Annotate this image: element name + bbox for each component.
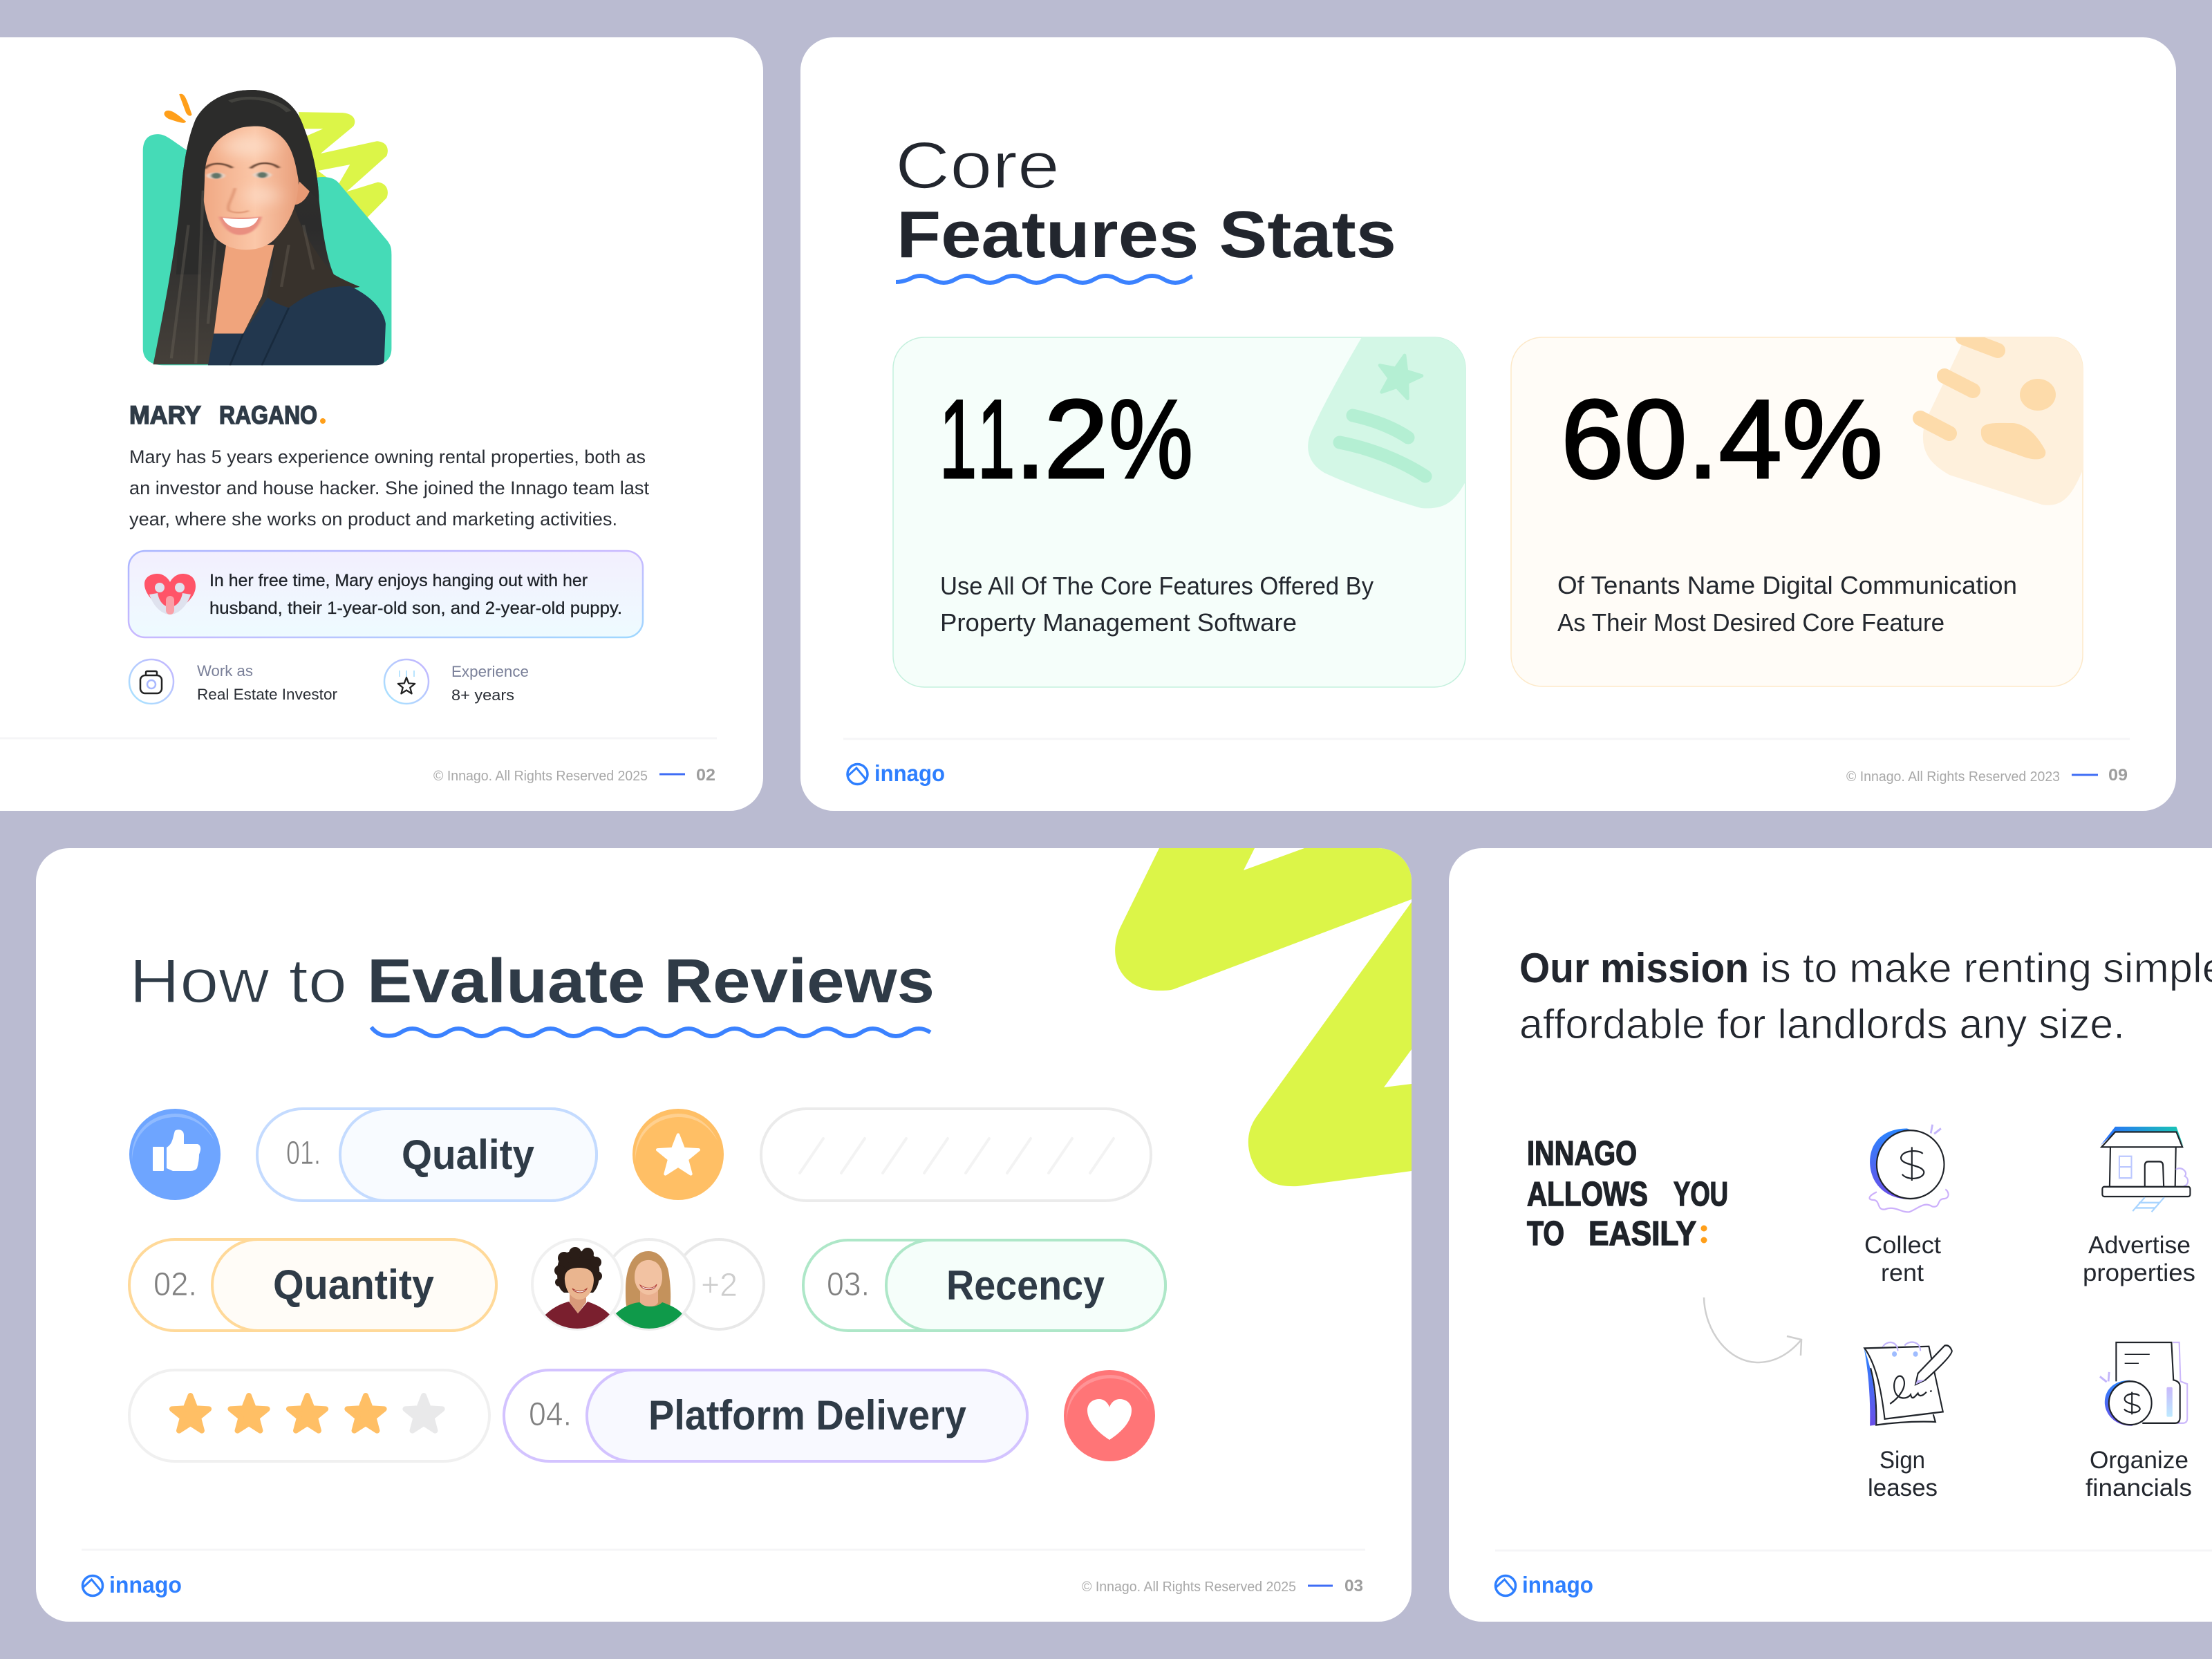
pill: 02 Quantity: 02.: [153, 1266, 197, 1303]
avatar: plus two: [674, 1239, 764, 1329]
avatars: [532, 1239, 764, 1331]
pill: star rating: [129, 1370, 489, 1461]
footer: page 03: [1082, 1577, 1363, 1595]
stat card: 11.2%: [893, 337, 1472, 687]
panel: How to Evaluate Reviews: [36, 848, 1412, 1622]
wavy underline: [371, 1027, 930, 1036]
pill: 03 Recency: [803, 1240, 1165, 1331]
title: How to: [129, 947, 347, 1016]
name heading: [129, 401, 326, 429]
work as: Real Estate Investor: [197, 686, 337, 703]
stat card: 11.2%: Use All Of The Core Features Offered By: [940, 572, 1374, 600]
rating stars: [172, 1396, 442, 1431]
label: advertise properties: [2083, 1232, 2195, 1286]
experience: 8+ years: [451, 686, 514, 704]
title: Core: [895, 129, 1060, 203]
pill: 04 Platform Delivery: 04.: [529, 1396, 572, 1433]
label: advertise properties: properties: [2083, 1259, 2195, 1286]
experience: Experience: [451, 663, 529, 680]
pill: empty striped: [761, 1109, 1151, 1201]
handwritten heading: ALLOWS: [1527, 1176, 1648, 1213]
name heading: MARY: [129, 401, 201, 429]
mission statement: Our mission: [1519, 945, 1749, 991]
footer: page 03: 03: [1344, 1577, 1363, 1595]
pill: 02 Quantity: [129, 1239, 496, 1331]
label: organize financials: [2086, 1447, 2192, 1501]
mission statement: is to make renting: [1761, 945, 2092, 991]
logo: innago: innago: [1522, 1572, 1593, 1597]
icon: advertise house: [2101, 1127, 2190, 1212]
panel: Core Features Stats: [800, 37, 2176, 811]
avatar: woman: [604, 1239, 694, 1331]
label: collect rent: [1864, 1232, 1941, 1286]
pill: 03 Recency: 03.: [827, 1266, 870, 1303]
icon: bag: [140, 671, 162, 693]
label: organize financials: financials: [2086, 1474, 2192, 1501]
stat card: 60.4%: [1511, 337, 2088, 686]
stat card: 60.4%: Of Tenants Name Digital Communication: [1557, 571, 2017, 599]
icon: organize financials: [2100, 1342, 2187, 1426]
logo: innago: innago: [874, 760, 945, 786]
icon: star badge: [632, 1109, 724, 1200]
label: sign leases: leases: [1868, 1474, 1938, 1501]
label: sign leases: [1868, 1447, 1938, 1501]
footer: page 02: 02: [696, 766, 715, 785]
figure: 11.2%: .: [1015, 377, 1046, 502]
footer: page 02: © Innago. All Rights Reserved 2025: [433, 769, 648, 784]
label: advertise properties: Advertise: [2088, 1232, 2191, 1259]
bio text: an investor and house hacker. She joined the Innago team last: [129, 478, 649, 498]
logo: innago: [847, 760, 945, 786]
pill: 04 Platform Delivery: [504, 1370, 1027, 1461]
bio text: year, where she works on product and marketing activities.: [129, 509, 617, 529]
figure: 11.2%: %: [1109, 377, 1193, 502]
name heading: RAGANO: [219, 401, 317, 429]
avatar: man: [532, 1239, 622, 1331]
pill: 04 Platform Delivery: Platform Delivery: [648, 1392, 967, 1438]
pill: 03 Recency: Recency: [946, 1262, 1105, 1309]
footer: page 03: © Innago. All Rights Reserved 2025: [1082, 1580, 1296, 1595]
handwritten heading: TO: [1527, 1215, 1564, 1253]
icon: thumbs up: [129, 1109, 221, 1200]
handwritten heading: INNAGO: [1527, 1135, 1637, 1172]
title: Features Stats: [897, 198, 1396, 272]
panel: Our mission: [1449, 848, 2212, 1622]
mission statement: affordable for landlords any size.: [1519, 1001, 2125, 1047]
figure: 11.2%: [939, 377, 1193, 502]
decoration: green blob with star: [1308, 337, 1472, 508]
work as: Work as: [197, 662, 253, 679]
handwritten heading: YOU: [1674, 1176, 1728, 1213]
footer: page 09: 09: [2108, 766, 2128, 785]
logo: innago: innago: [109, 1572, 182, 1597]
footer: page 09: © Innago. All Rights Reserved 2023: [1846, 769, 2060, 785]
decoration: orange blob: [1920, 337, 2088, 505]
callout: free time: In her free time, Mary enjoys hanging out with her: [209, 571, 588, 590]
footer: page 02: [433, 766, 715, 785]
label: sign leases: Sign: [1880, 1447, 1925, 1474]
bio text: [129, 447, 649, 529]
icon: sign leases: [1864, 1342, 1952, 1426]
callout: free time: [129, 551, 643, 637]
pill: 01 Quality: Quality: [402, 1132, 535, 1178]
work as: [129, 659, 337, 704]
label: collect rent: rent: [1881, 1259, 1924, 1286]
wavy underline: [896, 276, 1192, 283]
pill: 02 Quantity: Quantity: [273, 1262, 435, 1308]
experience: [384, 659, 529, 704]
pill: 01 Quality: [257, 1109, 597, 1201]
stat card: 60.4%: 60.4%: [1561, 377, 1883, 502]
decoration: lime zigzag: [1115, 848, 1412, 1186]
callout: free time: husband, their 1-year-old son, and 2-year-old puppy.: [209, 599, 622, 618]
figure: 11.2%: 11: [939, 377, 1015, 502]
title: Evaluate Reviews: [367, 947, 935, 1016]
icon: heart badge: [1064, 1370, 1155, 1461]
figure: 11.2%: 2: [1044, 377, 1109, 502]
illustration: portrait with shapes: [143, 90, 391, 365]
arrow: [1704, 1297, 1801, 1362]
stat card: 60.4%: As Their Most Desired Core Feature: [1557, 608, 1944, 637]
icon: family heart: [144, 574, 196, 615]
handwritten heading: EASILY: [1588, 1215, 1696, 1253]
label: organize financials: Organize: [2090, 1447, 2188, 1474]
bio text: Mary has 5 years experience owning rental properties, both as: [129, 447, 646, 467]
features grid: [1864, 1125, 2195, 1501]
handwritten heading: [1527, 1135, 1728, 1253]
avatar: plus two: +2: [701, 1267, 738, 1304]
icon: collect rent coin: [1870, 1125, 1949, 1212]
stat card: 11.2%: Property Management Software: [940, 608, 1297, 637]
panel: Mary Ragano profile: [0, 37, 763, 811]
pill: 01 Quality: 01.: [286, 1135, 321, 1172]
mission statement: [1519, 945, 2212, 1047]
title: [895, 129, 1396, 272]
label: collect rent: Collect: [1864, 1232, 1941, 1259]
footer: page 09: [1846, 766, 2128, 785]
icon: star: [398, 671, 415, 693]
title: [129, 947, 935, 1016]
